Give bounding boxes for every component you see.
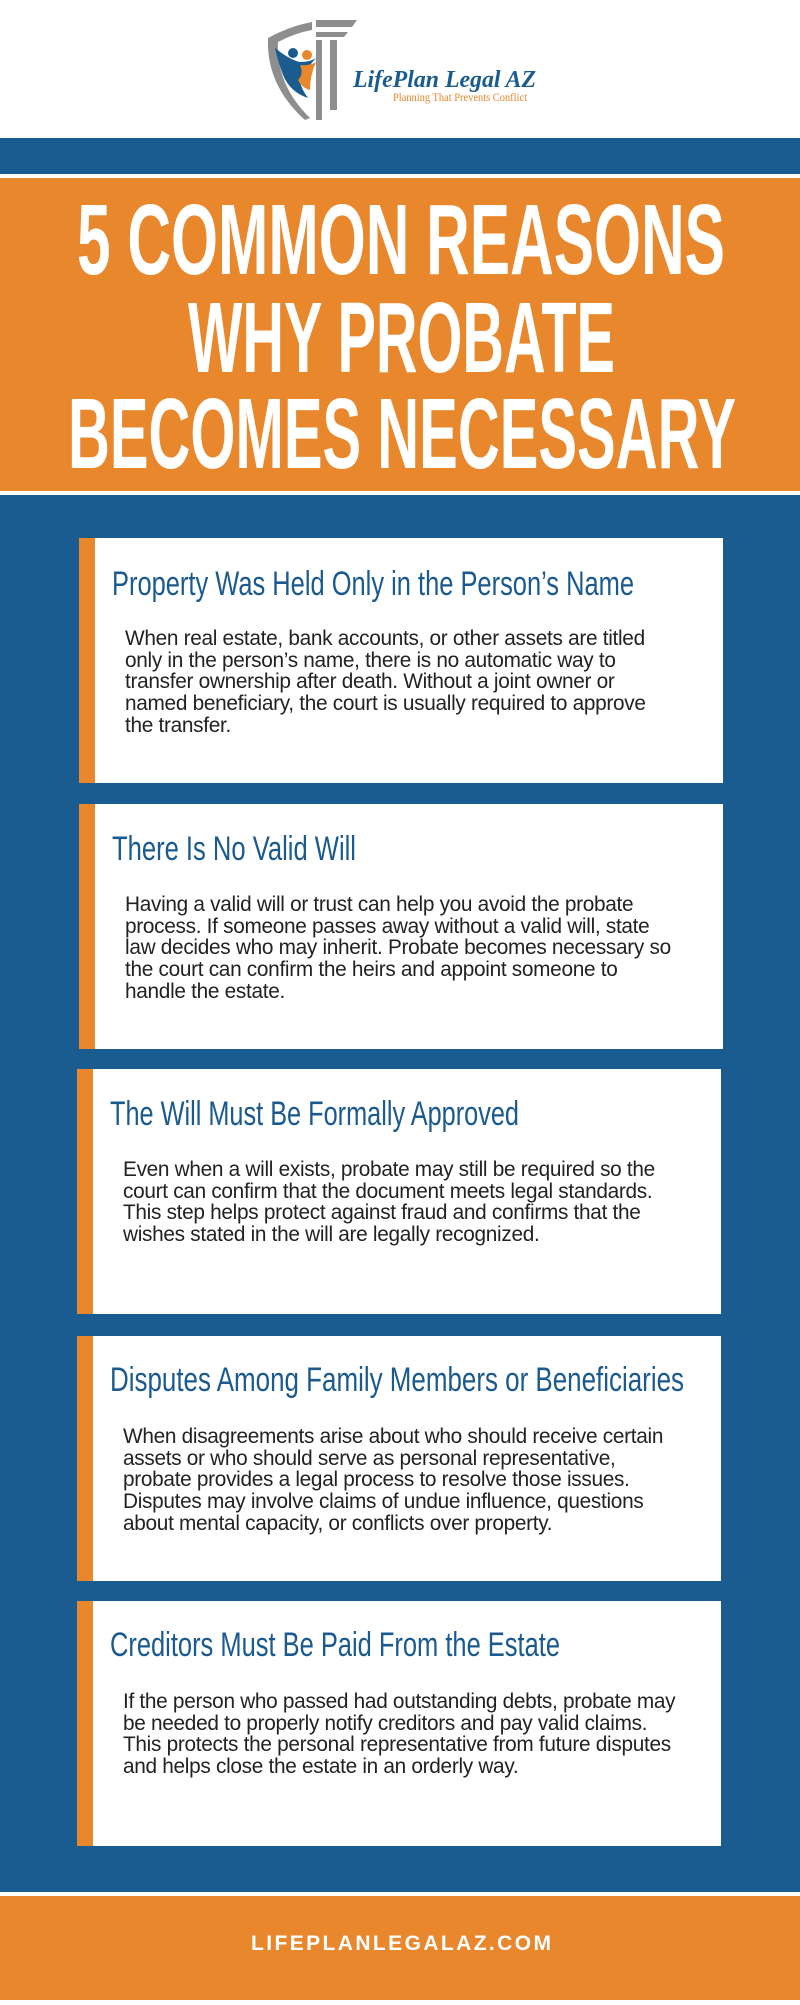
- icon: shield: [268, 20, 357, 120]
- card 4: Disputes may involve claims of undue influence, questions: [123, 1490, 643, 1513]
- header logo: [268, 20, 536, 120]
- card 5: Creditors Must Be Paid From the Estate: [110, 1626, 560, 1664]
- card 5: be needed to properly notify creditors and pay valid claims.: [123, 1712, 647, 1735]
- card 3: court can confirm that the document meets legal standards.: [123, 1180, 652, 1203]
- card 3: This step helps protect against fraud and confirms that the: [123, 1201, 641, 1224]
- card 3: The Will Must Be Formally Approved: [110, 1095, 519, 1133]
- card 4: When disagreements arise about who should receive certain: [123, 1425, 663, 1448]
- card 2: [79, 804, 723, 1049]
- card 2: law decides who may inherit. Probate becomes necessary so: [125, 936, 671, 959]
- card 2: process. If someone passes away without a valid will, state: [125, 915, 649, 938]
- card 1: transfer ownership after death. Without a joint owner or: [125, 670, 615, 693]
- card 3: wishes stated in the will are legally recognized.: [123, 1223, 539, 1246]
- card 4: assets or who should serve as personal representative,: [123, 1447, 615, 1470]
- card 1: named beneficiary, the court is usually required to approve: [125, 692, 646, 715]
- card 4: about mental capacity, or conflicts over property.: [123, 1512, 552, 1535]
- card 2: There Is No Valid Will: [112, 830, 356, 868]
- card 1: [79, 538, 723, 783]
- card 3: Even when a will exists, probate may still be required so the: [123, 1158, 655, 1181]
- card 1: When real estate, bank accounts, or other assets are titled: [125, 627, 645, 650]
- footer: [0, 1896, 800, 2000]
- card 5: [77, 1601, 721, 1846]
- card 5: and helps close the estate in an orderly way.: [123, 1755, 518, 1778]
- card 5: If the person who passed had outstanding debts, probate may: [123, 1690, 675, 1713]
- logo text: LifePlan Legal AZ: [352, 67, 536, 93]
- title banner: [0, 178, 800, 491]
- card 4: probate provides a legal process to resolve those issues.: [123, 1468, 630, 1491]
- tagline: Planning That Prevents Conflict: [393, 92, 528, 104]
- card 3: [77, 1069, 721, 1314]
- card 4: [77, 1336, 721, 1581]
- card 2: the court can confirm the heirs and appoint someone to: [125, 958, 617, 981]
- card 2: handle the estate.: [125, 980, 285, 1003]
- blue band: [0, 138, 800, 174]
- card 2: Having a valid will or trust can help you avoid the probate: [125, 893, 633, 916]
- card 1: the transfer.: [125, 714, 231, 737]
- card 1: only in the person’s name, there is no automatic way to: [125, 649, 616, 672]
- blue main panel: [0, 495, 800, 1892]
- footer: LIFEPLANLEGALAZ.COM: [251, 1932, 551, 1955]
- card 5: This protects the personal representative from future disputes: [123, 1733, 671, 1756]
